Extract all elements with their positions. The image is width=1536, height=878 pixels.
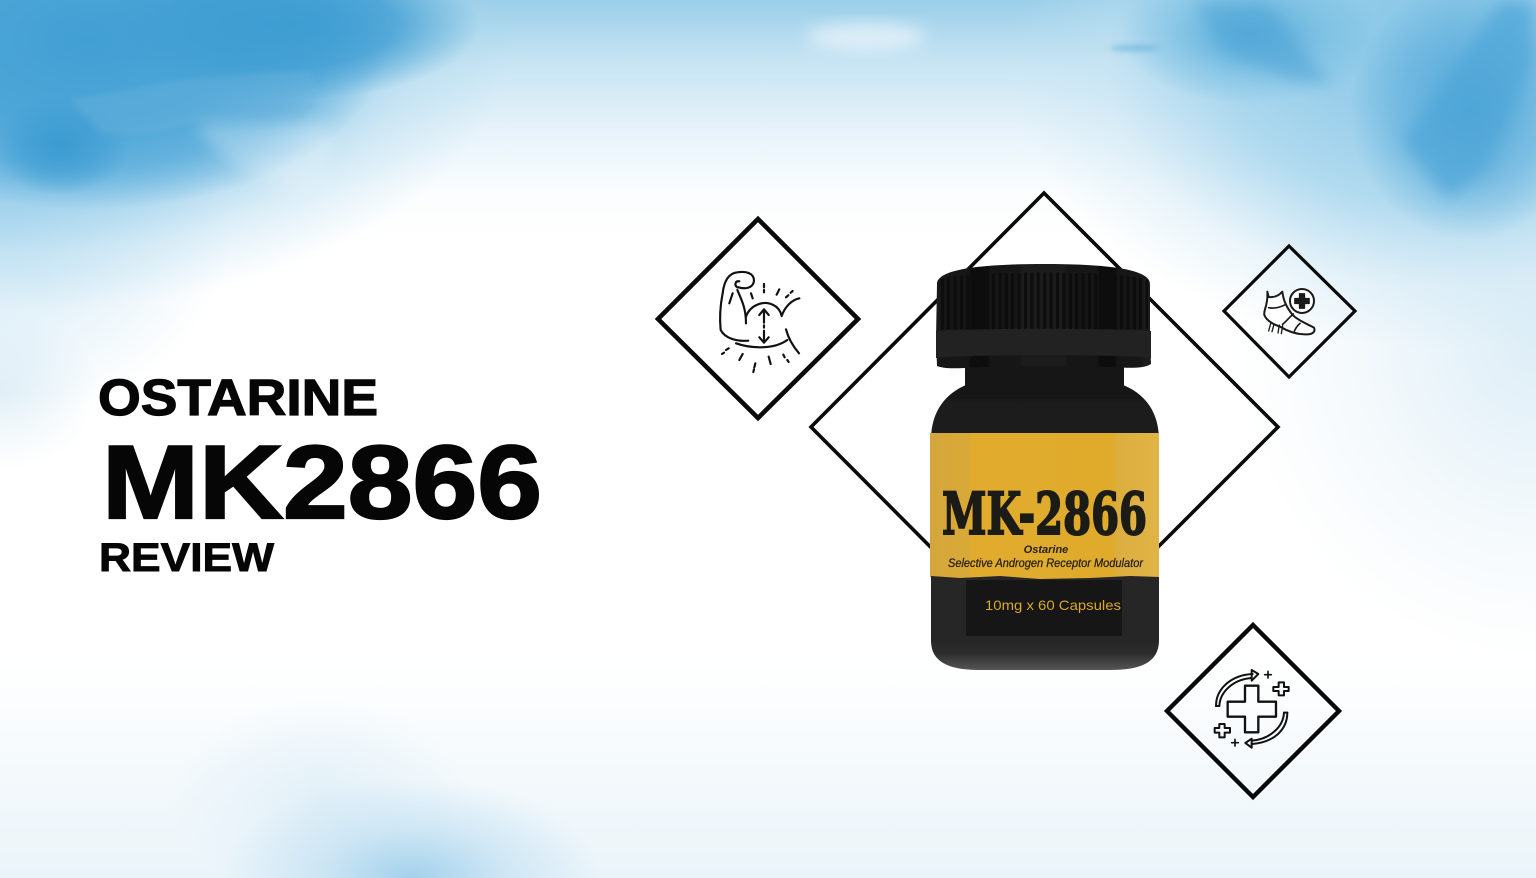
large diamond frame behind bottle — [811, 193, 1278, 661]
bottle body — [931, 372, 1159, 670]
icon: foot diamond — [1224, 246, 1355, 377]
title line: Ostarine: OSTARINE — [98, 369, 378, 426]
label lower panel — [931, 576, 1159, 632]
diamond frame — [658, 219, 858, 418]
diamond frame — [1224, 246, 1355, 377]
title: Ostarine MK2866 Review — [98, 369, 542, 580]
diamond frame — [1167, 625, 1339, 797]
label dark text block — [966, 580, 1122, 636]
product bottle: MK-2866 — [930, 264, 1159, 670]
icon: health diamond — [1167, 625, 1339, 797]
yellow label — [930, 433, 1159, 580]
label dosage: 10mg x 60 Capsules — [985, 597, 1121, 613]
title line: MK2866: MK2866 — [102, 425, 542, 541]
title line: Review: REVIEW — [99, 536, 274, 580]
label subheading: Ostarine — [1024, 544, 1068, 556]
label heading: MK-2866 — [942, 480, 1147, 548]
bottle neck shadow — [965, 366, 1124, 388]
icon: foot with medical cross — [1264, 289, 1314, 334]
icon: medical cross with arrows — [1215, 670, 1289, 748]
background details: swirls and streaks — [70, 2, 1534, 198]
label description: Selective Androgen Receptor Modulator — [948, 558, 1144, 570]
bottle cap — [936, 264, 1151, 368]
icon: flexed arm — [720, 272, 799, 372]
icon: muscle diamond — [658, 219, 858, 418]
